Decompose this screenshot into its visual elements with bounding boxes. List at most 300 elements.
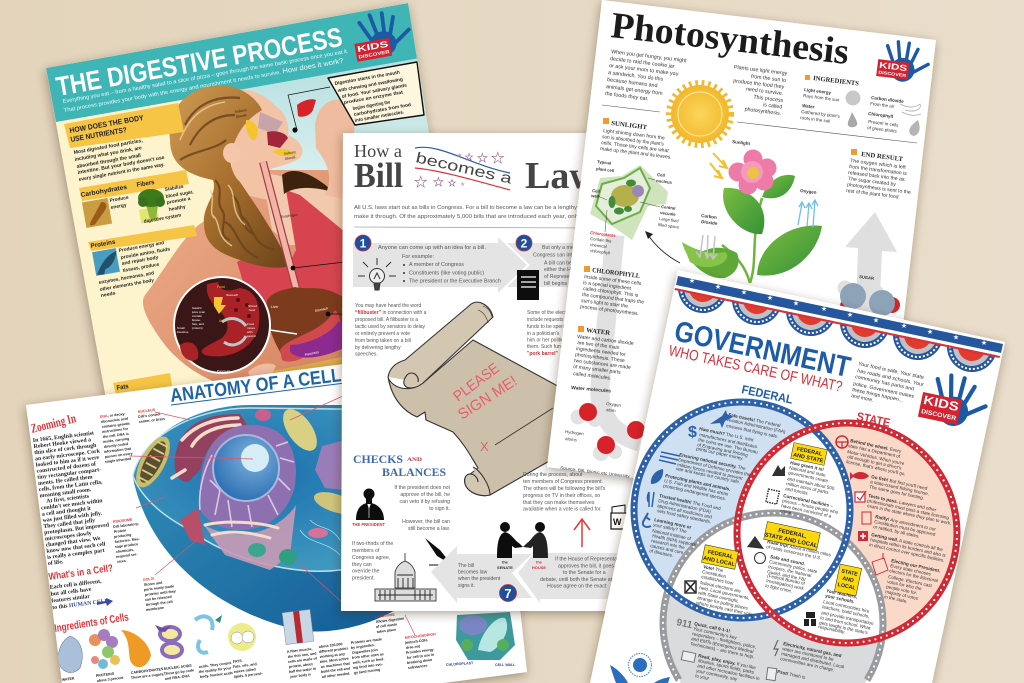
federal text: Health (NIH) supports bbox=[652, 533, 697, 547]
text: house of representatives: debate, until both the Senate and bbox=[540, 577, 617, 583]
magnified stomach view: contain bbox=[192, 314, 202, 318]
text: override: override the bbox=[352, 568, 380, 574]
tag: federal, state and local: FEDERAL, bbox=[778, 528, 808, 540]
intro text: has roads and schools. Your bbox=[857, 368, 925, 388]
cell part labels: takes place bbox=[377, 628, 396, 634]
sky background bbox=[230, 56, 429, 170]
text: filibuster: by delivering lengthy bbox=[355, 345, 401, 351]
icon: kids discover logo: DISCOVER bbox=[920, 408, 957, 422]
scroll text: please sign me: PLEASE bbox=[450, 360, 503, 405]
heading: checks and balances: CHECKS bbox=[353, 454, 403, 466]
panel: how does the body use nutrients: Stabilize bbox=[164, 184, 184, 193]
labels: senate and house: SENATE bbox=[497, 565, 513, 570]
intro text bbox=[354, 205, 579, 220]
cell part labels: ports newly made bbox=[144, 584, 174, 592]
state text: Motor Vehicles. When you're bbox=[847, 449, 905, 466]
ingredient captions bbox=[62, 637, 385, 683]
federal text: prints our paper money. bbox=[696, 446, 744, 461]
illustration: woman eating a strawberry: Pancreas bbox=[304, 350, 320, 357]
text: zooming in: constructed of dozens of bbox=[36, 462, 96, 475]
pointer lines bbox=[288, 87, 345, 314]
scroll text: please sign me: X bbox=[480, 439, 489, 454]
bunting banner: ★ bbox=[873, 316, 879, 324]
title: GOVERNMENT bbox=[672, 316, 854, 384]
scroll text: please sign me: SIGN ME! bbox=[455, 373, 520, 423]
text: pork barrel: Some of the elected bbox=[527, 310, 572, 316]
state and local text: teachers, build schools, bbox=[822, 604, 870, 619]
cell part labels: MITOCHONDRION bbox=[405, 632, 436, 640]
icon: president silhouette bbox=[356, 488, 384, 520]
federal and state text: prisons – house people who bbox=[782, 498, 839, 515]
federal icons: $ bbox=[688, 424, 697, 441]
labels bbox=[234, 108, 298, 219]
federal and local text: where people cast their vote. bbox=[696, 600, 754, 617]
federal text: manufactures and distributes bbox=[699, 432, 758, 449]
plant cell labels: plant cell bbox=[596, 166, 615, 173]
intro text: plants: need to survive. bbox=[746, 86, 783, 97]
panel: how does the body use nutrients: provide amino, fluids bbox=[120, 246, 171, 261]
plant cell labels: chemical bbox=[590, 242, 607, 249]
text: what's in a cell: Each cell is different, bbox=[50, 579, 102, 591]
federal and state text bbox=[780, 460, 839, 519]
magnified stomach view: Acid bbox=[219, 319, 226, 323]
tag: federal and state: AND STATE bbox=[792, 452, 824, 465]
other organelles bbox=[204, 505, 296, 570]
text: house of representatives: House agree on the exact bbox=[547, 584, 607, 590]
salivary glands bbox=[246, 120, 258, 140]
icon: kids discover logo: KIDS bbox=[922, 393, 960, 414]
text: during the debate: During the process, about bbox=[523, 472, 583, 478]
ingredient captions: These go by code bbox=[164, 668, 194, 676]
intro text: community has parks and bbox=[855, 374, 915, 392]
local text: your community, say bbox=[696, 668, 738, 682]
title: THE DIGESTIVE PROCESS bbox=[54, 22, 345, 102]
state and local text: to and from school. What bbox=[820, 615, 871, 631]
all three levels text: Community police, state bbox=[769, 559, 818, 574]
panel: how does the body use nutrients: Produce bbox=[109, 195, 129, 204]
icons: parks and prison bbox=[766, 465, 785, 504]
state and local text: your schools. bbox=[825, 593, 855, 604]
state and local text: gets taught is the state's bbox=[819, 620, 869, 635]
intro text: Your food is safe. Your state bbox=[858, 361, 925, 381]
icon: light bulb bbox=[358, 258, 396, 290]
text: zooming in: is really a complex part bbox=[47, 548, 105, 561]
federal text: Ensuring national security. The bbox=[679, 452, 747, 471]
arrow: red upward bbox=[574, 519, 590, 547]
illustration: scroll bbox=[388, 302, 565, 496]
bunting banner bbox=[674, 276, 1003, 358]
all three levels text: Investigation) work bbox=[766, 578, 805, 591]
panel: how does the body use nutrients bbox=[64, 103, 197, 395]
text: zooming in: thin slice of cork through bbox=[34, 443, 97, 456]
panel: how does the body use nutrients: absorbed through the small bbox=[76, 153, 142, 170]
state text: electors for the Electoral bbox=[889, 568, 938, 583]
ingredient captions: Organelles join bbox=[352, 648, 378, 655]
labels: Salivary bbox=[234, 108, 247, 114]
illustration: sun bbox=[671, 85, 729, 143]
intro text: plants: produce the food they bbox=[733, 78, 785, 91]
section: water bbox=[565, 326, 634, 442]
text: the bill becomes law: becomes law bbox=[458, 570, 488, 576]
magnified stomach view: with bbox=[247, 330, 253, 334]
text: what's in a cell: but all cells have bbox=[50, 587, 92, 598]
federal and state text: and maintain about 500 bbox=[787, 476, 835, 491]
ingredient captions: about 100,000 bbox=[319, 642, 343, 649]
chloroplast labels: CHLOROPLAST bbox=[446, 661, 474, 667]
state text: professionals must pass a state licensing bbox=[867, 498, 950, 520]
tag: federal and local: AND LOCAL bbox=[702, 556, 736, 568]
plant cell labels: nucleus bbox=[656, 178, 673, 185]
section: water: photosynthesis. These bbox=[575, 352, 625, 364]
panel: how does the body use nutrients: healthy bbox=[168, 204, 186, 213]
ingredient captions: protein, about bbox=[289, 662, 314, 669]
panel: how a bill becomes a law poster bbox=[341, 133, 640, 611]
text: override: members of bbox=[352, 548, 380, 554]
ingredient captions: cells are made of bbox=[288, 656, 318, 664]
federal text: research into the bbox=[651, 538, 686, 550]
text: override: Congress agree, bbox=[352, 555, 390, 561]
text: override bbox=[352, 541, 393, 582]
section: water: atom bbox=[606, 407, 616, 413]
plant cell labels: Chloroplasts bbox=[590, 230, 617, 238]
local text: Read, play, enjoy. If you like bbox=[698, 653, 757, 670]
section: ingredients bbox=[800, 75, 921, 136]
text: override: president. bbox=[352, 576, 375, 582]
text: filibuster: from being taken on a bill bbox=[355, 338, 411, 344]
local icon: 911: 911 bbox=[675, 617, 694, 631]
cell part labels: information that bbox=[104, 447, 132, 454]
panel: how does the body use nutrients: energy bbox=[110, 202, 127, 211]
venn diagram bbox=[634, 402, 957, 683]
title: How a bbox=[354, 141, 402, 161]
bunting banner: ★ bbox=[953, 334, 959, 342]
tag: federal and state: FEDERAL bbox=[796, 446, 823, 458]
tag: federal and state bbox=[791, 443, 827, 465]
text: veto bbox=[394, 485, 451, 532]
local text: Psst! Trash is bbox=[777, 669, 806, 680]
cell part labels: of cell waste bbox=[376, 622, 397, 629]
magnified stomach view: Food bbox=[247, 322, 254, 326]
text: override: If two-thirds of the bbox=[352, 541, 393, 547]
ingredient captions: the thin one, and bbox=[288, 652, 317, 659]
section: ingredients: Light energy bbox=[804, 87, 832, 95]
intro text bbox=[851, 361, 925, 404]
section: end result: from the transformation is bbox=[849, 164, 908, 177]
ingredient captions: the quality for your bbox=[199, 666, 232, 674]
nucleus bbox=[213, 435, 279, 501]
intro text: plants: photosynthesis. bbox=[744, 107, 781, 117]
text: veto: However, the bill can bbox=[402, 519, 450, 525]
state and local text: responsibility. bbox=[818, 624, 846, 635]
section: sunlight: sun is absorbed by the plant's bbox=[602, 134, 664, 148]
tag: state and local bbox=[834, 564, 862, 596]
federal and state text: million acres of parks bbox=[786, 481, 830, 495]
cell part labels: Cell laboratory. bbox=[113, 522, 139, 529]
state text: in direct control over specific facilities. bbox=[869, 542, 945, 563]
ingredient captions: half the water in bbox=[289, 667, 316, 674]
illustration: cell bbox=[129, 395, 420, 635]
cell part labels: proteins until they bbox=[145, 589, 176, 597]
local text: responders – firefighters, police, bbox=[692, 631, 757, 650]
plant labels bbox=[701, 139, 817, 226]
intro text: animals get energy from bbox=[606, 84, 663, 97]
grey path arrow bbox=[600, 235, 640, 442]
cell part labels: DNA, or deoxy- bbox=[100, 412, 127, 419]
intro text: or ask your mom to make you bbox=[609, 63, 679, 77]
heading: checks and balances: BALANCES bbox=[382, 467, 446, 479]
state text: Behind the wheel. Every bbox=[850, 438, 902, 454]
cell part labels: producing bbox=[114, 533, 132, 539]
panel: the digestive process poster bbox=[40, 1, 434, 396]
federal text: Drug Administration (FDA) bbox=[658, 498, 712, 514]
ingredient captions: different proteins bbox=[319, 646, 348, 654]
section: end result: The sugar created by bbox=[848, 176, 897, 188]
all three levels text: of roads crisscross the U.S. bbox=[766, 544, 822, 561]
federal and local text: held. Local governments, bbox=[699, 585, 750, 601]
labels: senate and house: HOUSE bbox=[532, 565, 546, 570]
text: zooming in: couldn't see much within bbox=[41, 498, 104, 512]
federal text: war and keeps our country safe. bbox=[676, 466, 741, 485]
header band bbox=[46, 3, 420, 122]
arrow: step 2: either the House bbox=[544, 267, 582, 273]
icon: kids discover logo bbox=[354, 11, 411, 62]
intro text: decide to raid the cookie jar bbox=[610, 56, 675, 70]
ingredient captions: lipids. 5 percent– bbox=[234, 671, 263, 679]
intro text: the foods they eat. bbox=[605, 91, 649, 102]
labels: senate and house: the bbox=[502, 560, 509, 564]
panel: how does the body use nutrients: Carbohydrates bbox=[80, 184, 128, 199]
federal and local text: Vote! The bbox=[703, 564, 724, 573]
mitochondrion bbox=[136, 436, 170, 488]
plant cell labels: vacuole bbox=[660, 210, 677, 217]
cell part labels bbox=[100, 408, 436, 670]
text: the bill becomes law: when the president bbox=[458, 576, 501, 582]
text: house of representatives: to the Senate for a bbox=[563, 570, 606, 576]
local ring bbox=[663, 513, 883, 680]
ingredient captions: gy (and moving bbox=[354, 668, 380, 675]
section: water: called molecules. bbox=[573, 371, 612, 382]
arrow: sugar: SUGAR bbox=[859, 274, 874, 281]
text: house of representatives: approves the bill, it goes bbox=[558, 564, 614, 570]
text: during the debate: The others will be following the bill's bbox=[523, 486, 606, 492]
all three levels text bbox=[765, 539, 832, 594]
cell part labels: Allows digestion bbox=[376, 617, 404, 624]
arrow: sugar bbox=[845, 212, 897, 340]
text: zooming in: changed that view. We bbox=[45, 536, 101, 549]
federal text: military forces needed to prevent bbox=[677, 462, 744, 481]
local text: Technicians) – are there to help. bbox=[690, 641, 755, 660]
panel: how does the body use nutrients: and repair body bbox=[121, 255, 159, 267]
section: water: atoms bbox=[565, 436, 577, 442]
section: ingredients: Carbon dioxide bbox=[871, 95, 904, 104]
title: ★ bbox=[491, 150, 504, 167]
ingredient captions: from other sites as bbox=[352, 652, 384, 660]
text: what's in a cell: features similar bbox=[51, 594, 91, 604]
intro text: and more. bbox=[851, 393, 874, 404]
ingredient captions: PROTEINS bbox=[96, 672, 115, 678]
text: zooming in: protoplasm. But improved bbox=[44, 522, 110, 536]
title: ★ bbox=[465, 152, 473, 162]
cell part labels: LYSOSOME bbox=[375, 613, 396, 619]
federal text: Protecting plants and animals. bbox=[665, 473, 731, 492]
text: filibuster: “filibuster” in connection with a bbox=[355, 310, 427, 316]
cell part labels: NUCLEUS bbox=[138, 408, 156, 414]
text: veto: still become a law. bbox=[408, 526, 450, 532]
federal and local text: federal elections are bbox=[700, 580, 742, 594]
title: Bill bbox=[354, 156, 403, 195]
state text: Constitution must be approved bbox=[874, 519, 936, 537]
state text bbox=[846, 438, 952, 604]
federal and local text: with State oversight, bbox=[698, 590, 739, 604]
magnified stomach view: Food bbox=[217, 285, 225, 289]
state and local text: and provide transportation bbox=[821, 610, 874, 626]
state text: Getting well. A state controls all the bbox=[871, 532, 944, 552]
plant cell labels: Contain the bbox=[590, 236, 612, 244]
panel: how does the body use nutrients: other elements the body bbox=[99, 277, 155, 293]
step 7 badge bbox=[500, 584, 516, 602]
bunting banner: ★ bbox=[689, 277, 695, 285]
magnified stomach view: Pancreas bbox=[217, 369, 231, 373]
icon: bread bbox=[82, 198, 112, 228]
tag: federal and local bbox=[702, 545, 738, 569]
text: zooming in: meaning small room. bbox=[39, 487, 92, 499]
ingredient captions: WATER bbox=[62, 676, 75, 682]
seal: eagle bbox=[610, 654, 670, 683]
magnified stomach view: lipase, bbox=[192, 318, 201, 322]
federal and state text: and forests. bbox=[785, 486, 809, 496]
arrow: step 1: A member of Congress bbox=[409, 262, 464, 268]
local text: Electricity, natural gas, and bbox=[783, 641, 842, 658]
intro text: plants: is called bbox=[763, 102, 783, 110]
all three levels text: Safe and sound. bbox=[770, 554, 806, 566]
plant cell labels: chlorophyll bbox=[590, 248, 610, 255]
subtitle: WHO TAKES CARE OF WHAT? bbox=[667, 342, 844, 396]
cell part labels: vices bbox=[117, 559, 126, 564]
cell part labels: inside, carrying bbox=[103, 437, 130, 444]
text: pork barrel bbox=[527, 310, 572, 357]
icon: kids discover logo: DISCOVER bbox=[358, 49, 391, 61]
state text: The same goes for hunting. bbox=[869, 484, 925, 501]
arrow: step 2: of Representatives bbox=[544, 274, 588, 280]
chloroplast labels: CELL WALL bbox=[495, 663, 516, 667]
cell part labels: contains genetic bbox=[102, 422, 130, 429]
text: zooming in: At first, scientists bbox=[46, 494, 90, 505]
cell part labels: passes on every bbox=[105, 452, 133, 459]
arrow: house to senate bbox=[518, 553, 640, 603]
section: end result: photosynthesis is sent to the bbox=[847, 182, 911, 196]
local text: to your bbox=[695, 673, 710, 681]
tag: federal and local: FEDERAL bbox=[707, 549, 734, 561]
icon: handshake figures bbox=[497, 522, 548, 558]
section: chlorophyll: is a special ingredient bbox=[583, 280, 632, 292]
labels: Esophagus bbox=[281, 213, 298, 219]
local icons bbox=[681, 640, 778, 681]
arrow: step 2: 2 bbox=[521, 236, 528, 250]
federal text: Department of Defense provides the bbox=[678, 457, 751, 477]
intro text: All U.S. laws start out as bills in Congress. For a bill to become a law can be a lengthy bbox=[354, 205, 577, 211]
callout: digestion starts in the mouth: into smaller molecules. bbox=[354, 109, 404, 123]
text: zooming in: was just filled with jelly. bbox=[42, 511, 103, 524]
arrow: to cell bbox=[648, 235, 680, 263]
label: the president: THE PRESIDENT bbox=[352, 522, 385, 527]
illustration: woman eating a strawberry: Stomach bbox=[314, 306, 328, 313]
federal and local text: Constitution bbox=[702, 569, 727, 579]
cell part labels: can be released bbox=[145, 595, 172, 602]
local text: libraries, sports fields, parks bbox=[698, 658, 755, 675]
icon: pen bbox=[425, 538, 452, 565]
federal text: U.S. Fish and Wildlife has areas bbox=[664, 478, 729, 497]
intro text: That process provides your body with the energy and nourishment it needs to survive. How does it work? bbox=[63, 58, 344, 114]
panel: how does the body use nutrients: every single nutrient in the same way. bbox=[78, 162, 166, 183]
title: ★ bbox=[477, 151, 488, 165]
plant cell labels: Typical bbox=[597, 159, 612, 166]
text: filibuster: or entirely prevent a vote bbox=[355, 331, 410, 337]
local text: Quick, call 9-1-1! bbox=[694, 621, 731, 634]
intro text: because humans and bbox=[607, 77, 658, 89]
text: zooming in: ments. He called them bbox=[38, 474, 93, 487]
federal text: How much? The U.S. mint bbox=[699, 426, 755, 443]
state text: state has a Department of bbox=[848, 443, 901, 459]
title: ANATOMY OF A CELL bbox=[169, 365, 343, 407]
cell part labels: dree-on) bbox=[406, 644, 421, 650]
panel: how does the body use nutrients: enzymes, hormones, and bbox=[98, 270, 155, 286]
text: zooming in: Zooming In bbox=[29, 410, 78, 436]
cell part labels: the cell. DNA is bbox=[103, 432, 129, 439]
callout: digestion starts in the mouth: produce an enzyme that bbox=[343, 90, 404, 105]
text: zooming in: know now that each cell bbox=[46, 542, 106, 555]
state text: people vote for. bbox=[886, 584, 918, 596]
illustration: water molecules bbox=[570, 403, 645, 461]
state text: a state-issued fishing license. bbox=[870, 479, 930, 496]
text: pork barrel: "pork barrel" bbox=[527, 351, 558, 357]
text: pork barrel: in a politician's bbox=[527, 331, 560, 337]
title: ★ bbox=[433, 175, 444, 189]
plant labels: Oxygen bbox=[800, 188, 817, 195]
text: veto: If the president does not bbox=[394, 485, 451, 491]
state ring bbox=[737, 423, 957, 643]
ingredient captions: Fats, oils, and bbox=[233, 662, 257, 669]
ingredient captions: and RNA–DNA bbox=[165, 674, 190, 681]
magnified stomach view: Gastric bbox=[192, 306, 202, 310]
section: chlorophyll bbox=[580, 266, 645, 317]
state text: hospitals within its borders and also is bbox=[870, 537, 947, 558]
panel: photosynthesis poster bbox=[547, 0, 936, 480]
arrow: step 1: Anyone can come up with an idea for a bill. bbox=[378, 245, 486, 251]
text: pork barrel: him or her politically bbox=[527, 338, 572, 344]
cell part labels: sage produce bbox=[115, 542, 138, 549]
cell part labels: Cell's control bbox=[138, 412, 161, 419]
illustration: sugar molecules bbox=[838, 280, 900, 316]
section: end result: END RESULT bbox=[861, 151, 904, 163]
ingredient captions: A fiber muscle, bbox=[287, 647, 313, 654]
federal and local text: arrange for polling places bbox=[697, 595, 749, 611]
organs bbox=[266, 287, 342, 354]
text: zooming in: looked to him as if it were bbox=[36, 455, 100, 469]
section: end result bbox=[846, 149, 911, 201]
magnified stomach view: Small bbox=[177, 326, 185, 330]
icon: kids discover logo bbox=[917, 370, 990, 432]
local text: and other recreation facilities in bbox=[697, 663, 760, 681]
illustration: woman eating a strawberry bbox=[143, 86, 355, 395]
local text bbox=[690, 621, 845, 682]
panel: anatomy of a cell poster bbox=[26, 345, 527, 683]
arrow: step 1 bbox=[353, 235, 527, 293]
cell part labels: respond ser- bbox=[116, 552, 139, 559]
intro text: plants: from the sun to bbox=[751, 74, 787, 84]
panel: how does the body use nutrients: digestive system bbox=[143, 212, 182, 225]
ingredient captions: CARBOHYDRATES bbox=[131, 667, 164, 675]
icon: fish bbox=[92, 248, 120, 276]
